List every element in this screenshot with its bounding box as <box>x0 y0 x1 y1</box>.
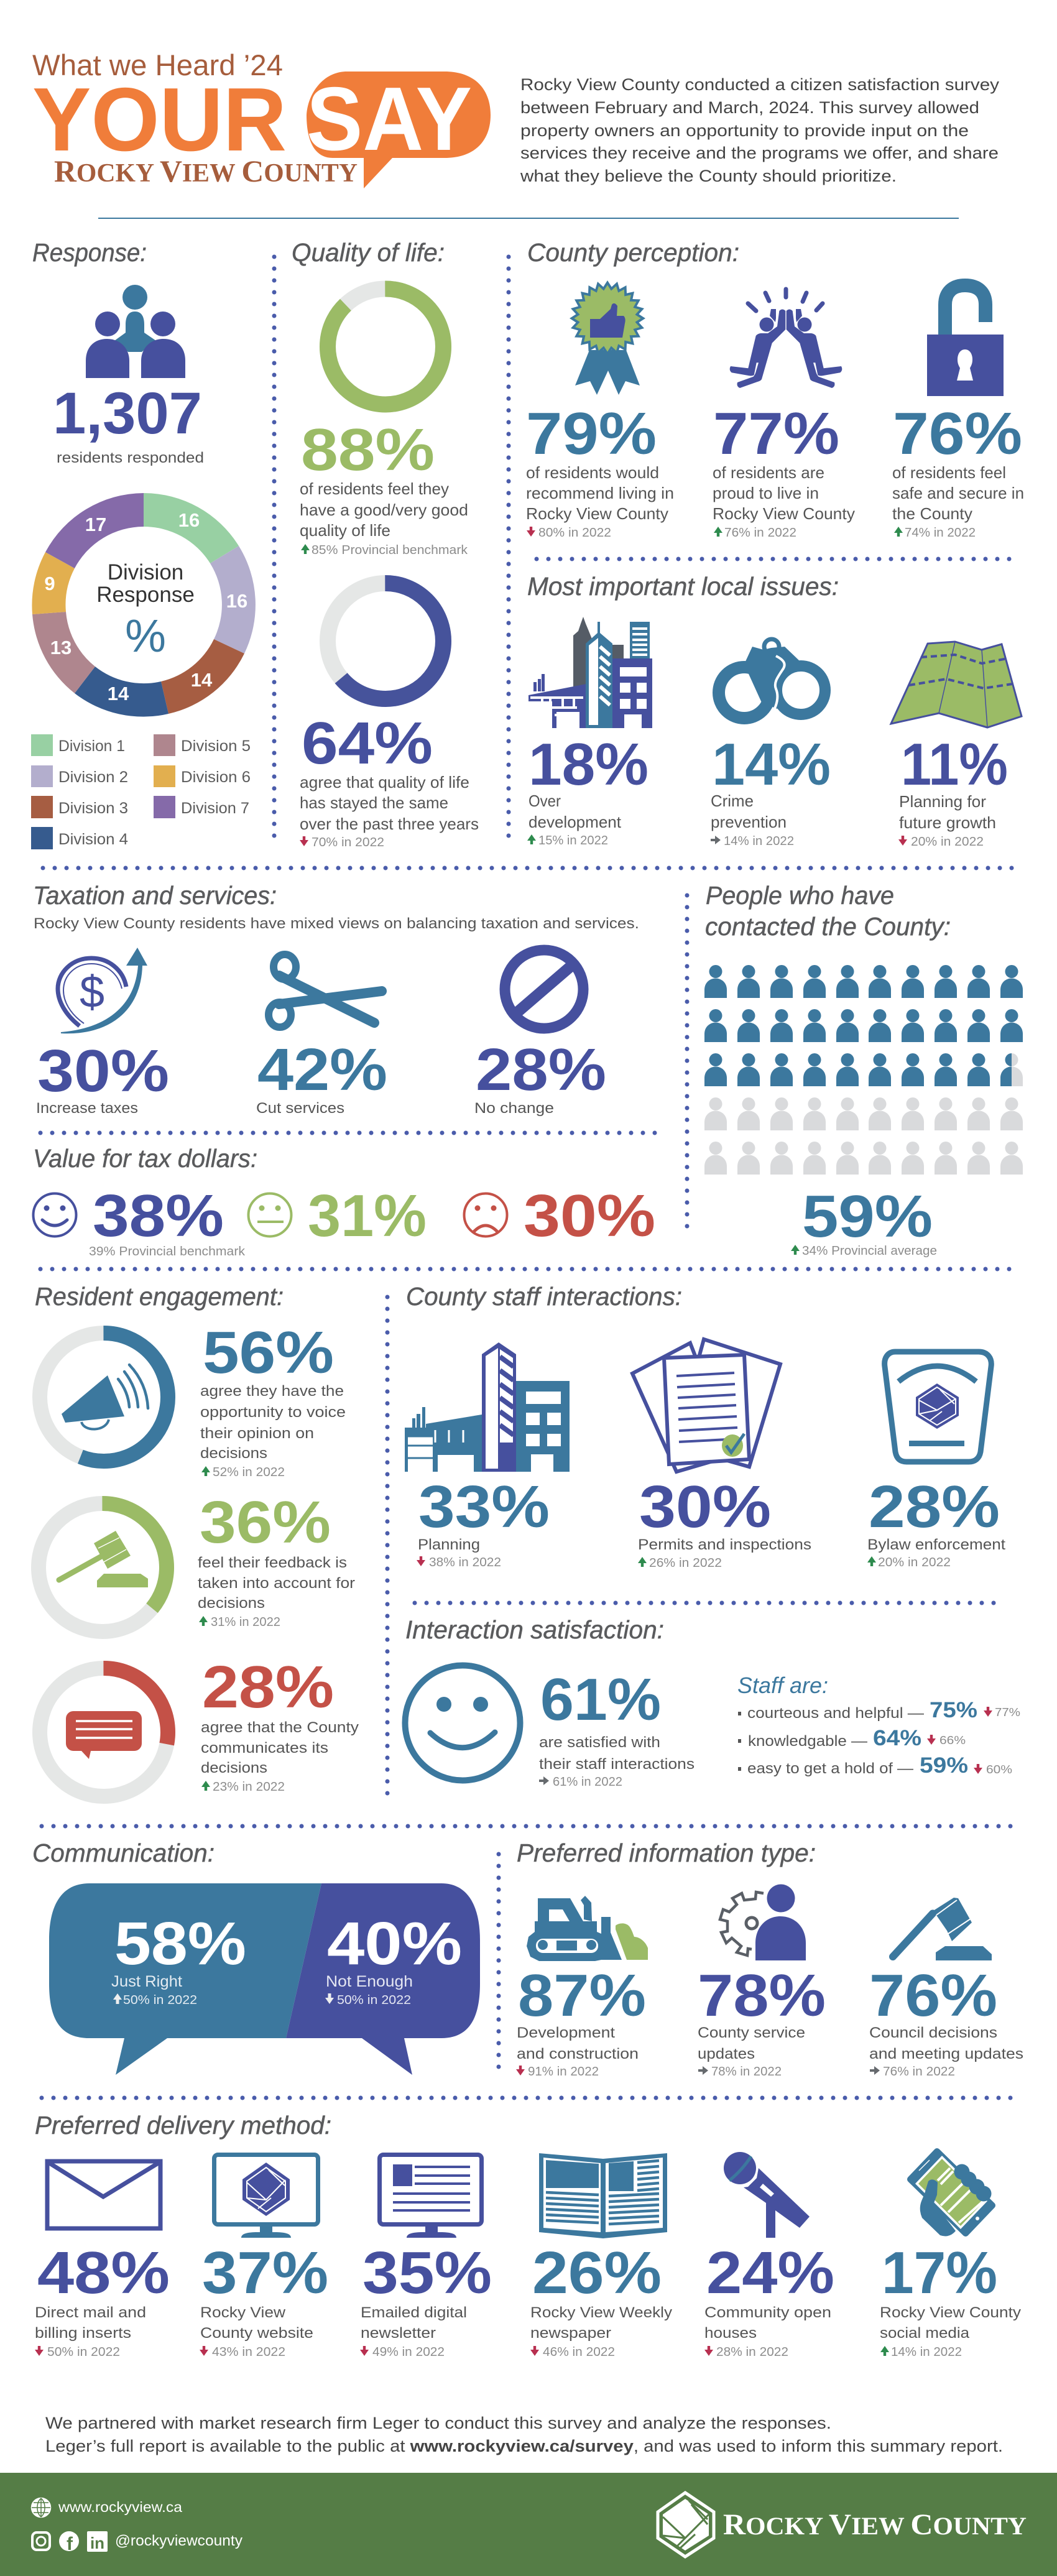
text: county communicates: decisions <box>201 1760 267 1776</box>
trend: 70% in 2022: 70% in 2022 <box>312 836 384 849</box>
note: 39% provincial benchmark: 39% Provincial benchmark <box>89 1245 246 1258</box>
list: easy to get a hold of <box>738 1753 1012 1778</box>
legend: divisions: Division 1 <box>58 737 125 755</box>
text: recommend living <box>526 463 674 523</box>
list: courteous and helpful <box>738 1698 1020 1722</box>
heading: preferred information type: Preferred information type: <box>517 1839 816 1867</box>
text: planning for future growth <box>899 792 996 832</box>
number: 77%: 77% <box>713 400 839 467</box>
label: bylaw enforcement: Bylaw enforcement <box>867 1536 1005 1553</box>
trend: 28% in 2022: 28% in 2022 <box>716 2345 788 2359</box>
number: 35%: 35% <box>362 2240 492 2306</box>
list: courteous and helpful: courteous and helpful — <box>747 1705 924 1722</box>
trend: 31% in 2022: 31% in 2022 <box>211 1615 280 1629</box>
chart: division response donut: 16 <box>178 509 200 531</box>
text: over development: development <box>528 813 622 831</box>
logo: rocky view county <box>658 2493 1027 2557</box>
text: safe and secure: the County <box>892 504 972 523</box>
footer band <box>0 2473 1057 2576</box>
icon: permit documents <box>632 1339 780 1472</box>
trend: 46% in 2022: 46% in 2022 <box>543 2345 615 2359</box>
title: your: YOUR <box>32 69 287 170</box>
text: proud to live: Rocky View County <box>713 504 855 523</box>
text: satisfied with staff <box>539 1734 695 1773</box>
panel: quality of life <box>292 238 479 849</box>
logo: rocky view county: ROCKY VIEW COUNTY <box>723 2508 1027 2541</box>
text: development and construction <box>517 2024 639 2062</box>
legend: divisions: Division 5 <box>181 737 251 755</box>
trend: 43% in 2022: 43% in 2022 <box>212 2345 285 2359</box>
trend: 80% in 2022: 80% in 2022 <box>538 526 611 540</box>
number: 1,307: 1,307 <box>53 381 202 446</box>
label: cut services: Cut services <box>256 1100 344 1117</box>
text: opportunity to voice: opportunity to voice <box>200 1404 346 1421</box>
icon: neutral face <box>249 1194 291 1236</box>
chart: division response donut: 14 <box>108 683 129 704</box>
icon: microphone <box>724 2152 810 2238</box>
heading: taxation and services: Taxation and services: <box>33 881 277 910</box>
text: feedback taken into account <box>198 1554 355 1612</box>
icon: dollar with rising arrow <box>58 948 147 1033</box>
trend: 76% in 2022: 76% in 2022 <box>724 526 796 540</box>
text: county communicates: agree that the County <box>201 1719 359 1736</box>
heading: response: Response: <box>32 238 147 267</box>
chart: division response donut: Response <box>96 583 195 607</box>
text: feedback taken into account: taken into account for <box>198 1575 355 1592</box>
panel: county staff interactions <box>405 1282 1005 1570</box>
text: satisfied with staff: are satisfied with <box>539 1734 660 1751</box>
text: research partner note <box>45 2414 1003 2455</box>
trend: 74% in 2022: 74% in 2022 <box>905 526 976 540</box>
icon: map <box>891 642 1022 727</box>
text: council decisions: Council decisions <box>869 2024 997 2041</box>
number: 17%: 17% <box>882 2240 997 2306</box>
icon: scissors <box>269 954 382 1027</box>
panel: preferred information type <box>516 1839 1023 2079</box>
segment: just right: 58% <box>114 1909 246 1977</box>
icon: dollar with rising arrow: $ <box>80 967 104 1017</box>
icon: globe <box>32 2498 50 2517</box>
text: county communicates <box>201 1719 359 1776</box>
text: over development: Over <box>528 792 561 810</box>
text: proud to live: proud to live in <box>713 484 819 502</box>
icon: facebook: f <box>67 2534 73 2554</box>
text: safe and secure <box>892 463 1024 523</box>
heading: preferred delivery method: Preferred delivery method: <box>35 2111 331 2140</box>
link: website: www.rockyview.ca <box>58 2499 182 2515</box>
text: county website: Rocky View <box>200 2304 286 2321</box>
intro text <box>520 75 1000 185</box>
number: 76%: 76% <box>893 400 1022 467</box>
panel: response <box>31 238 256 849</box>
icon: smiley <box>34 1194 76 1236</box>
number: 56%: 56% <box>203 1319 334 1386</box>
title: what we heard: What we Heard ’24 <box>32 48 283 81</box>
legend: divisions: Division 4 <box>58 831 128 848</box>
text: community open houses: houses <box>704 2325 757 2342</box>
text: crime prevention: Crime <box>711 792 754 810</box>
intro text: property owners an opportunity to provide input on the <box>520 121 969 140</box>
text: county website: County website <box>200 2325 313 2342</box>
decorative dotted dividers <box>40 218 1015 2098</box>
title block <box>32 48 491 188</box>
trend: 23% in 2022: 23% in 2022 <box>213 1780 285 1794</box>
trend: 52% in 2022: 52% in 2022 <box>213 1466 285 1479</box>
text: good quality of life: have a good/very good <box>300 501 468 519</box>
list: easy to get a hold of: easy to get a hold of — <box>747 1760 913 1777</box>
trend: 14% in 2022: 14% in 2022 <box>891 2345 962 2359</box>
text: proud to live <box>713 463 855 523</box>
icon: newsletter monitor <box>379 2155 481 2238</box>
icon: instagram <box>32 2532 50 2550</box>
icon: planning buildings <box>405 1342 570 1472</box>
panel: value for tax dollars <box>33 1144 655 1258</box>
text: development and construction: Development <box>517 2024 615 2041</box>
link: social handle: @rockyviewcounty <box>115 2532 242 2549</box>
trend: 91% in 2022: 91% in 2022 <box>528 2065 599 2079</box>
icon: newspaper <box>539 2153 667 2238</box>
chart: 56% ring with megaphone <box>40 1333 168 1461</box>
segment: not enough: 40% <box>327 1909 462 1977</box>
panel: interaction satisfaction <box>405 1615 1020 1789</box>
number: 37%: 37% <box>202 2240 328 2306</box>
text: council decisions: and meeting updates <box>869 2046 1023 2062</box>
text: county service updates: County service <box>698 2024 805 2041</box>
chart: division response donut: % <box>125 610 166 662</box>
text: quality stayed same: agree that quality of life <box>300 773 469 792</box>
heading: people who have contacted <box>705 881 951 941</box>
chart: speech bubble split <box>49 1883 480 2075</box>
number: 76%: 76% <box>869 1962 997 2029</box>
chart: division response donut: 17 <box>85 514 106 535</box>
trend: 78% in 2022: 78% in 2022 <box>711 2065 782 2079</box>
heading: interaction satisfaction: Interaction satisfaction: <box>405 1615 664 1644</box>
chart: division response donut: Division <box>108 560 183 584</box>
segment: not enough: Not Enough <box>326 1973 413 1990</box>
chart: 28% ring with speech bubble <box>40 1668 168 1796</box>
list: courteous and helpful: 77% <box>995 1706 1020 1719</box>
panel: communication <box>32 1839 480 2075</box>
text: weekly newspaper: Rocky View Weekly <box>530 2304 672 2321</box>
text: emailed newsletter: newsletter <box>361 2325 436 2342</box>
list: knowledgable: knowledgable — <box>748 1733 867 1750</box>
number: 18%: 18% <box>528 731 649 798</box>
trend: 61% in 2022: 61% in 2022 <box>553 1775 622 1789</box>
trend: 49% in 2022: 49% in 2022 <box>372 2345 445 2359</box>
trend: 15% in 2022: 15% in 2022 <box>538 834 608 847</box>
text: community open houses: Community open <box>704 2304 831 2321</box>
text: research partner note: We partnered with market research firm Leger to conduct this survey and analyze the responses. <box>45 2414 831 2432</box>
text: emailed newsletter <box>361 2304 467 2342</box>
list: easy to get a hold of: 59% <box>920 1753 968 1778</box>
heading: people who have contacted: People who have <box>706 881 894 910</box>
chart: 88% donut <box>328 289 443 404</box>
text: proud to live: of residents are <box>713 463 824 482</box>
list: courteous and helpful: 75% <box>930 1698 977 1722</box>
heading: resident engagement: Resident engagement: <box>35 1282 284 1311</box>
chart: division response donut <box>32 493 256 717</box>
text: safe and secure: of residents feel <box>892 463 1006 482</box>
list: easy to get a hold of: 60% <box>986 1763 1012 1776</box>
icon: linkedin: in <box>90 2534 104 2552</box>
panel: most important local issues <box>527 572 1022 849</box>
text: feedback taken into account: feel their feedback is <box>198 1554 347 1571</box>
icon: handcuffs <box>719 639 825 718</box>
list: knowledgable: 64% <box>873 1726 921 1750</box>
number: 87%: 87% <box>518 1962 646 2029</box>
text: opportunity to voice: agree they have the <box>200 1383 344 1400</box>
text: council decisions <box>869 2024 1023 2062</box>
text: opportunity to voice: decisions <box>200 1445 267 1462</box>
text: crime prevention: prevention <box>711 813 787 831</box>
panel: resident engagement <box>35 1282 359 1796</box>
icon: facebook <box>59 2531 79 2554</box>
text: quality stayed same: over the past three years <box>300 815 479 833</box>
number: 48%: 48% <box>37 2240 170 2306</box>
intro text: services they receive and the programs we offer, and share <box>520 144 999 162</box>
panel: county perception <box>526 238 1024 540</box>
intro text: what they believe the County should prioritize. <box>520 167 897 185</box>
heading: value for tax dollars: Value for tax dollars: <box>33 1144 257 1173</box>
number: 28%: 28% <box>476 1036 606 1103</box>
icon: envelope <box>47 2161 160 2228</box>
number: 64%: 64% <box>302 710 433 777</box>
icon: say speech bubble <box>307 72 491 188</box>
text: crime prevention <box>711 792 787 831</box>
icon: county website monitor <box>214 2155 318 2238</box>
icon: large smiley <box>405 1665 520 1781</box>
intro text: between February and March, 2024. This survey allowed <box>520 98 979 117</box>
title: rocky view county: ROCKY VIEW COUNTY <box>54 154 358 188</box>
icon: padlock <box>927 285 1004 396</box>
chart: division response donut: 13 <box>50 637 72 658</box>
text: opportunity to voice <box>200 1383 346 1462</box>
number: 31%: 31% <box>308 1183 427 1249</box>
intro text: Rocky View County conducted a citizen satisfaction survey <box>520 75 1000 94</box>
legend: divisions: Division 3 <box>58 800 128 817</box>
text: direct mail <box>35 2304 146 2342</box>
chart: division response donut: 14 <box>191 669 213 691</box>
legend: divisions: Division 2 <box>58 769 128 786</box>
legend: divisions: Division 7 <box>181 800 249 817</box>
text: over development <box>528 792 622 831</box>
title: say: SAY <box>307 68 472 169</box>
icon: high five <box>730 289 842 388</box>
number: 36%: 36% <box>200 1489 331 1556</box>
number: 30%: 30% <box>524 1183 655 1249</box>
text: development and construction: and construction <box>517 2046 639 2062</box>
chart: 64% donut <box>328 583 443 699</box>
icon: sad face <box>464 1194 507 1236</box>
text: county communicates: communicates its <box>201 1740 328 1757</box>
number: 38%: 38% <box>93 1183 224 1249</box>
icon: people group <box>86 285 185 378</box>
heading: quality of life: Quality of life: <box>292 238 445 267</box>
icon: no change symbol <box>505 950 583 1028</box>
number: 28%: 28% <box>869 1474 1000 1540</box>
number: 28%: 28% <box>202 1654 334 1720</box>
trend: 38% in 2022: 38% in 2022 <box>429 1556 501 1569</box>
panel: taxation and services <box>33 881 639 1117</box>
label: planning: Planning <box>418 1536 480 1553</box>
chart: division response donut: 9 <box>44 573 55 594</box>
label: no change: No change <box>474 1100 554 1117</box>
icon: bylaw badge <box>885 1352 991 1462</box>
text: research partner note: Leger’s full report is available to the public at www.rockyview.ca/survey , and was used to inform this summary report. <box>45 2437 1003 2455</box>
text: satisfied with staff: their staff interactions <box>539 1756 695 1773</box>
text: community open houses <box>704 2304 831 2342</box>
segment: just right: 50% in 2022 <box>123 1993 197 2007</box>
list: knowledgable: 66% <box>939 1734 966 1747</box>
label: increase taxes: Increase taxes <box>36 1100 138 1117</box>
segment: just right: Just Right <box>111 1973 182 1990</box>
trend: 20% in 2022: 20% in 2022 <box>878 1556 951 1569</box>
number: 24%: 24% <box>706 2240 834 2306</box>
number: 79%: 79% <box>526 400 657 467</box>
text: good quality of life: of residents feel they <box>300 479 449 498</box>
text: weekly newspaper <box>530 2304 672 2342</box>
text: weekly newspaper: newspaper <box>530 2325 611 2342</box>
number: 59%: 59% <box>802 1183 933 1250</box>
text: social media: Rocky View County <box>880 2304 1021 2321</box>
trend: 76% in 2022: 76% in 2022 <box>883 2065 955 2079</box>
legend: divisions: Division 6 <box>181 769 251 786</box>
text: planning for future growth: Planning for <box>899 792 986 811</box>
number: 26%: 26% <box>532 2240 662 2306</box>
trend: 14% in 2022: 14% in 2022 <box>724 834 794 848</box>
text: good quality of life <box>300 479 468 540</box>
text: county service updates <box>698 2024 805 2062</box>
number: 14%: 14% <box>712 731 831 798</box>
segment: not enough <box>286 1883 480 2075</box>
number: 30%: 30% <box>37 1038 169 1104</box>
text: recommend living: recommend living in <box>526 484 674 502</box>
text: emailed newsletter: Emailed digital <box>361 2304 467 2321</box>
panel: preferred delivery method <box>35 2111 1021 2359</box>
text: quality stayed same <box>300 773 479 833</box>
label: permits and inspections: Permits and inspections <box>638 1536 811 1553</box>
text: direct mail: Direct mail and <box>35 2304 146 2321</box>
segment: just right <box>49 1883 321 2075</box>
number: 61%: 61% <box>540 1666 661 1733</box>
icon: city buildings <box>528 617 652 728</box>
number: 78%: 78% <box>698 1962 826 2029</box>
heading: county staff interactions: County staff interactions: <box>406 1282 682 1311</box>
text: planning for future growth: future growth <box>899 813 996 832</box>
text: social media <box>880 2304 1021 2342</box>
text: direct mail: billing inserts <box>35 2325 131 2342</box>
legend: divisions <box>31 734 251 849</box>
segment: not enough: 50% in 2022 <box>337 1993 411 2007</box>
icon: council gavel <box>885 1898 992 1960</box>
text: opportunity to voice: their opinion on <box>200 1425 314 1442</box>
heading: county perception: County perception: <box>527 238 739 267</box>
icon: bulldozer <box>527 1896 648 1961</box>
text: county service updates: updates <box>698 2046 755 2062</box>
number: 11%: 11% <box>901 731 1008 798</box>
icon: linkedin <box>87 2531 108 2552</box>
heading: communication: Communication: <box>32 1839 215 1867</box>
text: safe and secure: safe and secure in <box>892 484 1024 502</box>
number: 42%: 42% <box>257 1036 387 1103</box>
text: social media: social media <box>880 2325 970 2342</box>
text: recommend living: Rocky View County <box>526 504 668 523</box>
trend: 34% provincial average: 34% Provincial average <box>802 1244 937 1258</box>
chart: division response donut: 16 <box>226 590 247 612</box>
text: mixed views: Rocky View County residents have mixed views on balancing taxation and services. <box>34 915 639 932</box>
text: good quality of life: quality of life <box>300 521 390 540</box>
heading: staff are: Staff are: <box>737 1673 828 1698</box>
label: residents responded: residents responded <box>57 450 204 466</box>
number: 88%: 88% <box>301 417 435 483</box>
text: quality stayed same: has stayed the same <box>300 793 448 812</box>
number: 33%: 33% <box>418 1474 550 1540</box>
icon: phone social media <box>910 2151 992 2236</box>
chart: 36% ring with gavel <box>39 1503 167 1632</box>
number: 30%: 30% <box>639 1474 771 1540</box>
chart: pictogram of people <box>704 965 1023 1175</box>
trend: 20% in 2022: 20% in 2022 <box>911 835 984 849</box>
heading: people who have contacted: contacted the County: <box>705 912 951 941</box>
trend: 85% provincial benchmark: 85% Provincial benchmark <box>312 543 468 557</box>
panel: people who have contacted the county <box>704 881 1023 1258</box>
heading: local issues: Most important local issues: <box>527 572 839 601</box>
text: feedback taken into account: decisions <box>198 1595 265 1612</box>
icon: person with gear <box>720 1884 806 1960</box>
text: recommend living: of residents would <box>526 463 659 482</box>
text: county website <box>200 2304 313 2342</box>
trend: 50% in 2022: 50% in 2022 <box>47 2345 120 2359</box>
trend: 26% in 2022: 26% in 2022 <box>649 1556 722 1570</box>
list: knowledgable <box>738 1726 966 1750</box>
icon: ribbon with thumbs up <box>570 280 645 395</box>
